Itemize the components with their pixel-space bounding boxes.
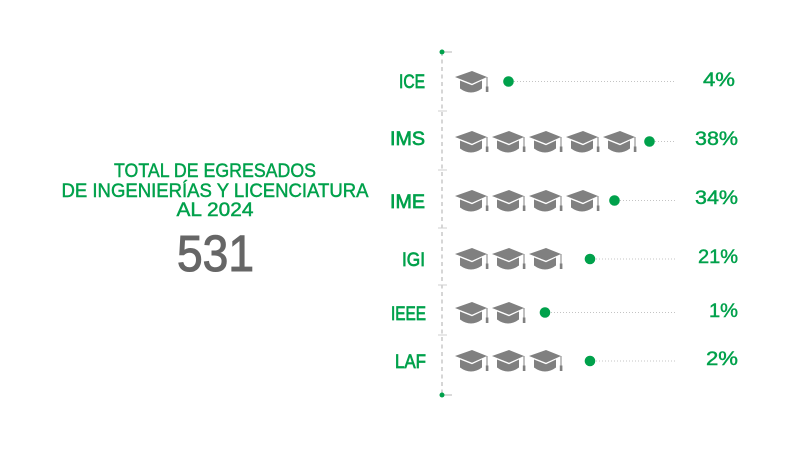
total number: 531 bbox=[177, 225, 254, 282]
value: 2%: 2% bbox=[706, 348, 738, 370]
row: ICE bbox=[399, 69, 735, 93]
row: IMS bbox=[390, 128, 738, 152]
dotted line and marker bbox=[503, 76, 676, 87]
label: LAF: LAF bbox=[395, 352, 426, 373]
row: IME bbox=[390, 187, 738, 213]
label: IMS: IMS bbox=[390, 129, 425, 150]
title: DE INGENIERÍAS Y LICENCIATURA bbox=[62, 179, 368, 202]
label: IEEE: IEEE bbox=[391, 304, 426, 325]
row: LAF bbox=[395, 348, 738, 373]
label: IME: IME bbox=[390, 192, 425, 213]
value: 34%: 34% bbox=[695, 187, 738, 209]
row: IEEE bbox=[391, 300, 738, 325]
title bbox=[62, 160, 368, 221]
value: 1%: 1% bbox=[709, 300, 738, 322]
title: AL 2024 bbox=[176, 199, 254, 221]
icons: 2 graduation caps bbox=[455, 302, 525, 324]
value: 4%: 4% bbox=[703, 69, 735, 91]
icons: 4 graduation caps bbox=[455, 190, 599, 212]
icons: 1 graduation cap bbox=[455, 71, 488, 92]
value: 21%: 21% bbox=[698, 246, 738, 268]
dotted line and marker bbox=[540, 307, 676, 318]
label: IGI: IGI bbox=[402, 250, 425, 271]
icons: 3 graduation caps bbox=[455, 248, 562, 270]
row: IGI bbox=[402, 246, 738, 271]
icons: 3 graduation caps bbox=[455, 350, 562, 372]
dotted line and marker bbox=[644, 136, 676, 147]
label: ICE: ICE bbox=[399, 72, 425, 93]
dotted line and marker bbox=[585, 254, 676, 264]
vertical axis bbox=[438, 50, 452, 398]
icons: 5 graduation caps bbox=[455, 131, 636, 152]
value: 38%: 38% bbox=[695, 128, 738, 150]
dotted line and marker bbox=[585, 356, 676, 366]
title: TOTAL DE EGRESADOS bbox=[114, 160, 316, 182]
dotted line and marker bbox=[609, 195, 676, 206]
